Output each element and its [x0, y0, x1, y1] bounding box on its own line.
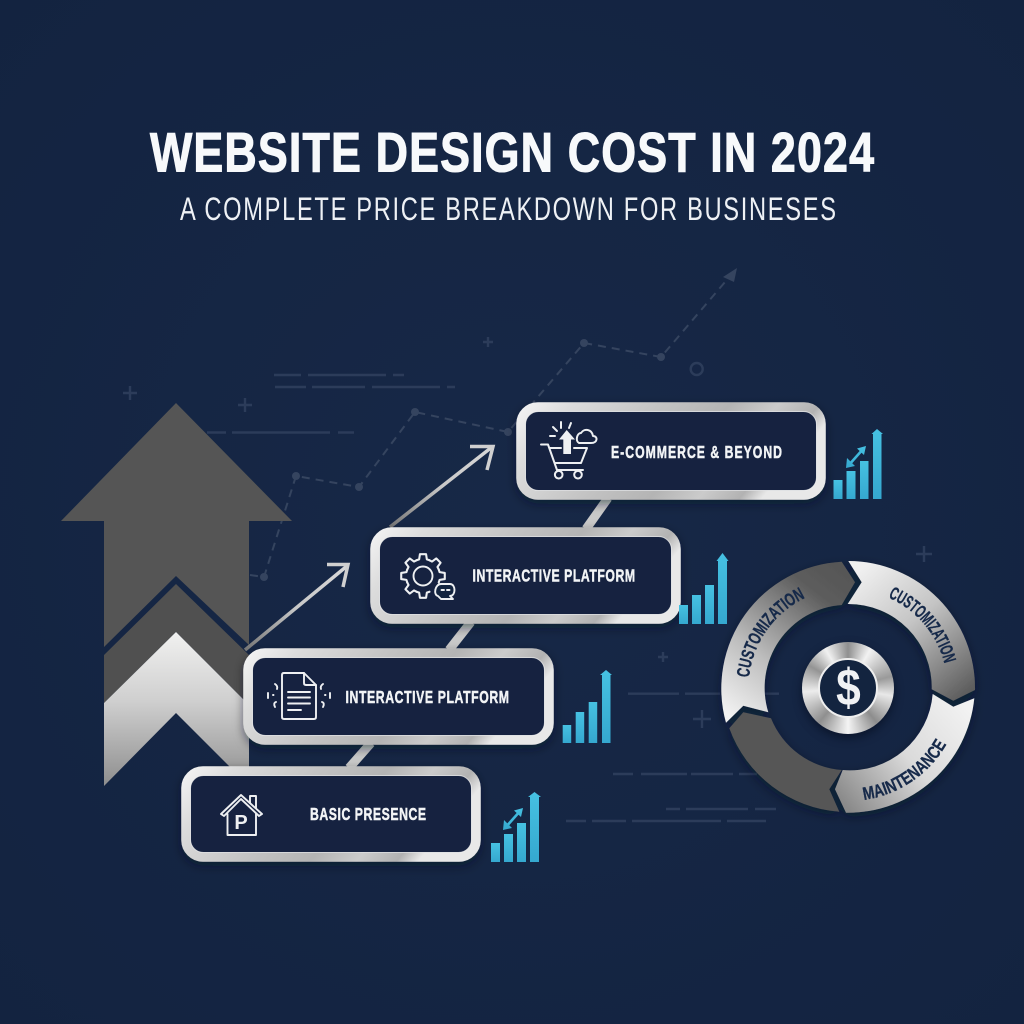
growth arrow upper — [390, 446, 493, 527]
icon: dollar medallion — [802, 642, 894, 734]
bar chart: step 3 — [679, 553, 728, 624]
icon: shopping cart with arrow and cloud — [541, 422, 597, 479]
big upward arrow — [61, 403, 292, 786]
segment: blank dark — [729, 712, 842, 812]
step 1: basic presence panel — [186, 771, 476, 857]
label: INTERACTIVE PLATFORM — [346, 688, 509, 708]
icon: dollar medallion: $ — [836, 659, 860, 717]
label: INTERACTIVE PLATFORM — [473, 566, 635, 586]
segment: customization right — [848, 561, 975, 706]
cost cycle ring — [717, 561, 975, 817]
icon: document — [268, 673, 330, 719]
subtitle: A COMPLETE PRICE BREAKDOWN FOR BUSINESES — [180, 192, 836, 227]
bar chart: step 1 — [491, 792, 541, 862]
icon: house — [221, 795, 262, 835]
step connectors — [349, 498, 608, 768]
segment: customization right: CUSTOMIZATION — [890, 587, 956, 664]
step 3: interactive platform panel — [375, 532, 676, 619]
growth arrow lower — [245, 564, 348, 650]
icon: gear with chat bubble — [401, 554, 454, 599]
segment: customization left — [717, 562, 856, 723]
segment: maintenance: MAINTENANCE — [862, 738, 946, 800]
segment: maintenance — [834, 694, 974, 817]
title: WEBSITE DESIGN COST IN 2024 — [150, 121, 874, 184]
bar chart: step 4 — [834, 429, 883, 499]
label: E-COMMERCE & BEYOND — [611, 443, 782, 463]
step 4: e-commerce panel — [521, 407, 821, 495]
step 2: interactive platform panel — [248, 653, 549, 740]
segment: customization left: CUSTOMIZATION — [736, 587, 805, 677]
label: BASIC PRESENCE — [310, 805, 426, 825]
bar chart: step 2 — [563, 670, 612, 743]
background trend line — [250, 268, 737, 581]
icon: house: P — [234, 812, 248, 834]
